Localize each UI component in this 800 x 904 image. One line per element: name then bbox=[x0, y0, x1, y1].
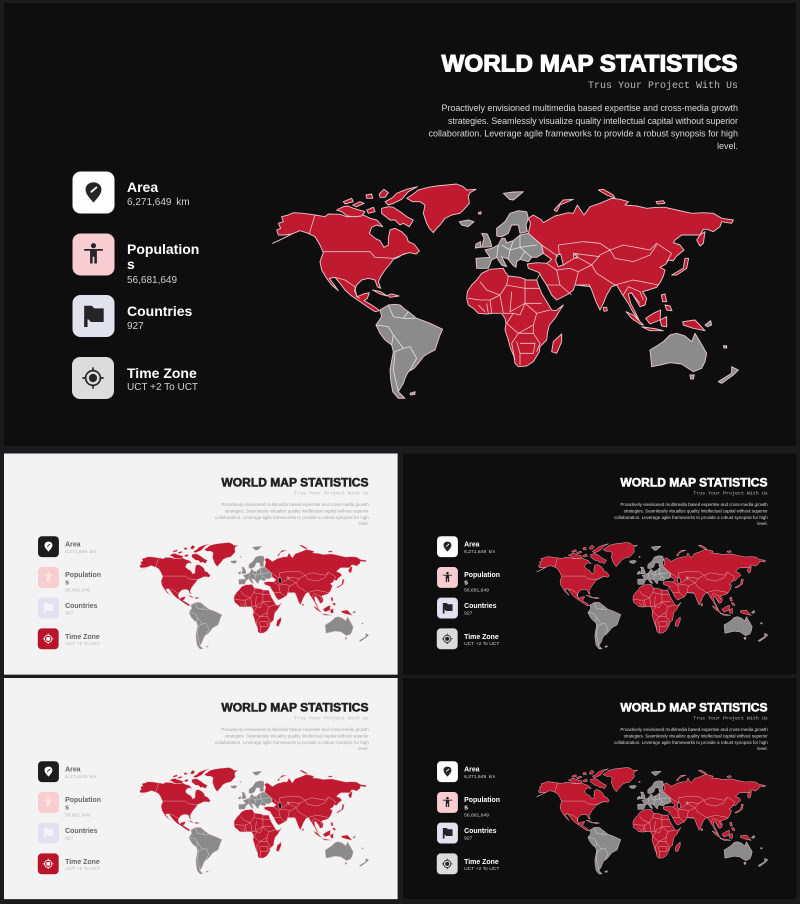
stat: population: s bbox=[127, 256, 135, 272]
stat: population: 56,681,649 bbox=[464, 588, 489, 594]
stat: time zone bbox=[38, 853, 100, 874]
title: WORLD MAP STATISTICS bbox=[442, 50, 738, 78]
stat: time zone: Time Zone bbox=[464, 859, 499, 866]
description text: strategies. Seamlessly visualize quality intellectual capital without superior bbox=[448, 116, 738, 126]
stat: countries: Countries bbox=[65, 828, 98, 835]
stat: time zone: Time Zone bbox=[127, 365, 197, 381]
description text: level. bbox=[757, 746, 768, 751]
stat: area: 6,271,649 km bbox=[65, 774, 96, 780]
stat: area bbox=[72, 172, 190, 214]
subtitle: Trus Your Project With Us bbox=[693, 491, 768, 497]
title: WORLD MAP STATISTICS bbox=[221, 701, 369, 715]
stat: area: 6,271,649 km bbox=[127, 197, 190, 208]
stat: population: Population bbox=[464, 797, 500, 804]
description text: level. bbox=[757, 521, 768, 526]
stat: population bbox=[38, 567, 101, 594]
description text: level. bbox=[358, 521, 369, 526]
stat: time zone: UCT +2 To UCT bbox=[65, 641, 100, 647]
description text: Proactively envisioned multimedia based expertise and cross-media growth bbox=[221, 727, 369, 732]
stat: population: s bbox=[464, 805, 468, 812]
stat: time zone bbox=[437, 628, 499, 649]
world map bbox=[537, 542, 768, 649]
stat: area: Area bbox=[464, 766, 480, 773]
stat: population bbox=[72, 234, 199, 286]
description text: strategies. Seamlessly visualize quality intellectual capital without superior bbox=[225, 509, 369, 514]
description text: collaboration. Leverage agile frameworks to provide a robust synopsis for high bbox=[215, 515, 369, 520]
stat: countries: Countries bbox=[127, 303, 193, 319]
stat: population: s bbox=[464, 580, 468, 587]
description text: Proactively envisioned multimedia based expertise and cross-media growth bbox=[221, 502, 369, 507]
stat: area bbox=[38, 536, 96, 557]
stat: countries: Countries bbox=[464, 828, 497, 835]
stat: area bbox=[437, 761, 495, 782]
description text: collaboration. Leverage agile frameworks to provide a robust synopsis for high bbox=[428, 128, 738, 138]
description text: level. bbox=[358, 746, 369, 751]
subtitle: Trus Your Project With Us bbox=[693, 716, 768, 722]
stat: time zone bbox=[437, 853, 499, 874]
subtitle: Trus Your Project With Us bbox=[294, 491, 369, 497]
world map bbox=[138, 767, 369, 874]
stat: time zone: Time Zone bbox=[65, 859, 100, 866]
stat: area: 6,271,649 km bbox=[65, 549, 96, 555]
description text bbox=[215, 502, 369, 526]
stat: area bbox=[437, 536, 495, 557]
stat: countries: 927 bbox=[65, 611, 74, 617]
panel: light slide bottom bbox=[4, 678, 398, 899]
stat: population: 56,681,649 bbox=[65, 813, 90, 819]
stat: population: s bbox=[65, 580, 69, 587]
stat: countries: 927 bbox=[65, 836, 74, 842]
description text: Proactively envisioned multimedia based expertise and cross-media growth bbox=[620, 727, 768, 732]
stat: countries bbox=[38, 598, 98, 618]
world map bbox=[138, 542, 369, 649]
subtitle: Trus Your Project With Us bbox=[294, 716, 369, 722]
description text bbox=[614, 727, 768, 751]
stat: time zone: UCT +2 To UCT bbox=[464, 866, 499, 872]
panel: dark slide bottom bbox=[403, 678, 797, 899]
description text: Proactively envisioned multimedia based expertise and cross-media growth bbox=[442, 103, 738, 113]
stat: population: 56,681,649 bbox=[464, 813, 489, 819]
stat: countries: Countries bbox=[65, 603, 98, 610]
stat: time zone: UCT +2 To UCT bbox=[464, 641, 499, 647]
stat: population bbox=[437, 792, 500, 819]
stat: countries: 927 bbox=[464, 836, 473, 842]
stat: population: Population bbox=[65, 572, 101, 579]
stat: time zone: UCT +2 To UCT bbox=[127, 382, 198, 393]
stat: area: Area bbox=[464, 541, 480, 548]
stat: time zone: Time Zone bbox=[464, 634, 499, 641]
description text: strategies. Seamlessly visualize quality intellectual capital without superior bbox=[624, 734, 768, 739]
stat: population: 56,681,649 bbox=[127, 275, 177, 286]
stat: population: 56,681,649 bbox=[65, 588, 90, 594]
stat: population: Population bbox=[127, 241, 199, 257]
stat: countries bbox=[38, 823, 98, 843]
stat: population: Population bbox=[464, 572, 500, 579]
stat: countries bbox=[437, 598, 497, 618]
description text bbox=[215, 727, 369, 751]
description text: collaboration. Leverage agile frameworks to provide a robust synopsis for high bbox=[614, 740, 768, 745]
stat: countries: 927 bbox=[127, 321, 144, 332]
stat: time zone: Time Zone bbox=[65, 634, 100, 641]
description text: strategies. Seamlessly visualize quality intellectual capital without superior bbox=[225, 734, 369, 739]
stat: countries bbox=[437, 823, 497, 843]
description text: collaboration. Leverage agile frameworks to provide a robust synopsis for high bbox=[215, 740, 369, 745]
stat: area: Area bbox=[127, 179, 158, 195]
stat: countries: 927 bbox=[464, 611, 473, 617]
stat: population bbox=[437, 567, 500, 594]
description text bbox=[428, 103, 738, 151]
stat: time zone bbox=[72, 357, 198, 399]
panel: main dark slide bbox=[4, 3, 796, 446]
panel: light slide top bbox=[4, 453, 398, 675]
stat: population: Population bbox=[65, 797, 101, 804]
title: WORLD MAP STATISTICS bbox=[620, 701, 768, 715]
stat: area: 6,271,649 km bbox=[464, 774, 495, 780]
stat: population bbox=[38, 792, 101, 819]
description text: strategies. Seamlessly visualize quality intellectual capital without superior bbox=[624, 509, 768, 514]
description text bbox=[614, 502, 768, 526]
stat: countries bbox=[72, 295, 193, 337]
description text: collaboration. Leverage agile frameworks to provide a robust synopsis for high bbox=[614, 515, 768, 520]
stat: area bbox=[38, 761, 96, 782]
world map bbox=[273, 184, 738, 398]
stat: population: s bbox=[65, 805, 69, 812]
title: WORLD MAP STATISTICS bbox=[221, 476, 369, 490]
title: WORLD MAP STATISTICS bbox=[620, 476, 768, 490]
subtitle: Trus Your Project With Us bbox=[588, 80, 738, 92]
stat: countries: Countries bbox=[464, 603, 497, 610]
stat: time zone: UCT +2 To UCT bbox=[65, 866, 100, 872]
stat: time zone bbox=[38, 628, 100, 649]
description text: Proactively envisioned multimedia based expertise and cross-media growth bbox=[620, 502, 768, 507]
stat: area: Area bbox=[65, 766, 81, 773]
stat: area: 6,271,649 km bbox=[464, 549, 495, 555]
stat: area: Area bbox=[65, 541, 81, 548]
description text: level. bbox=[717, 141, 738, 151]
panel: dark slide top bbox=[403, 453, 797, 675]
world map bbox=[537, 767, 768, 874]
